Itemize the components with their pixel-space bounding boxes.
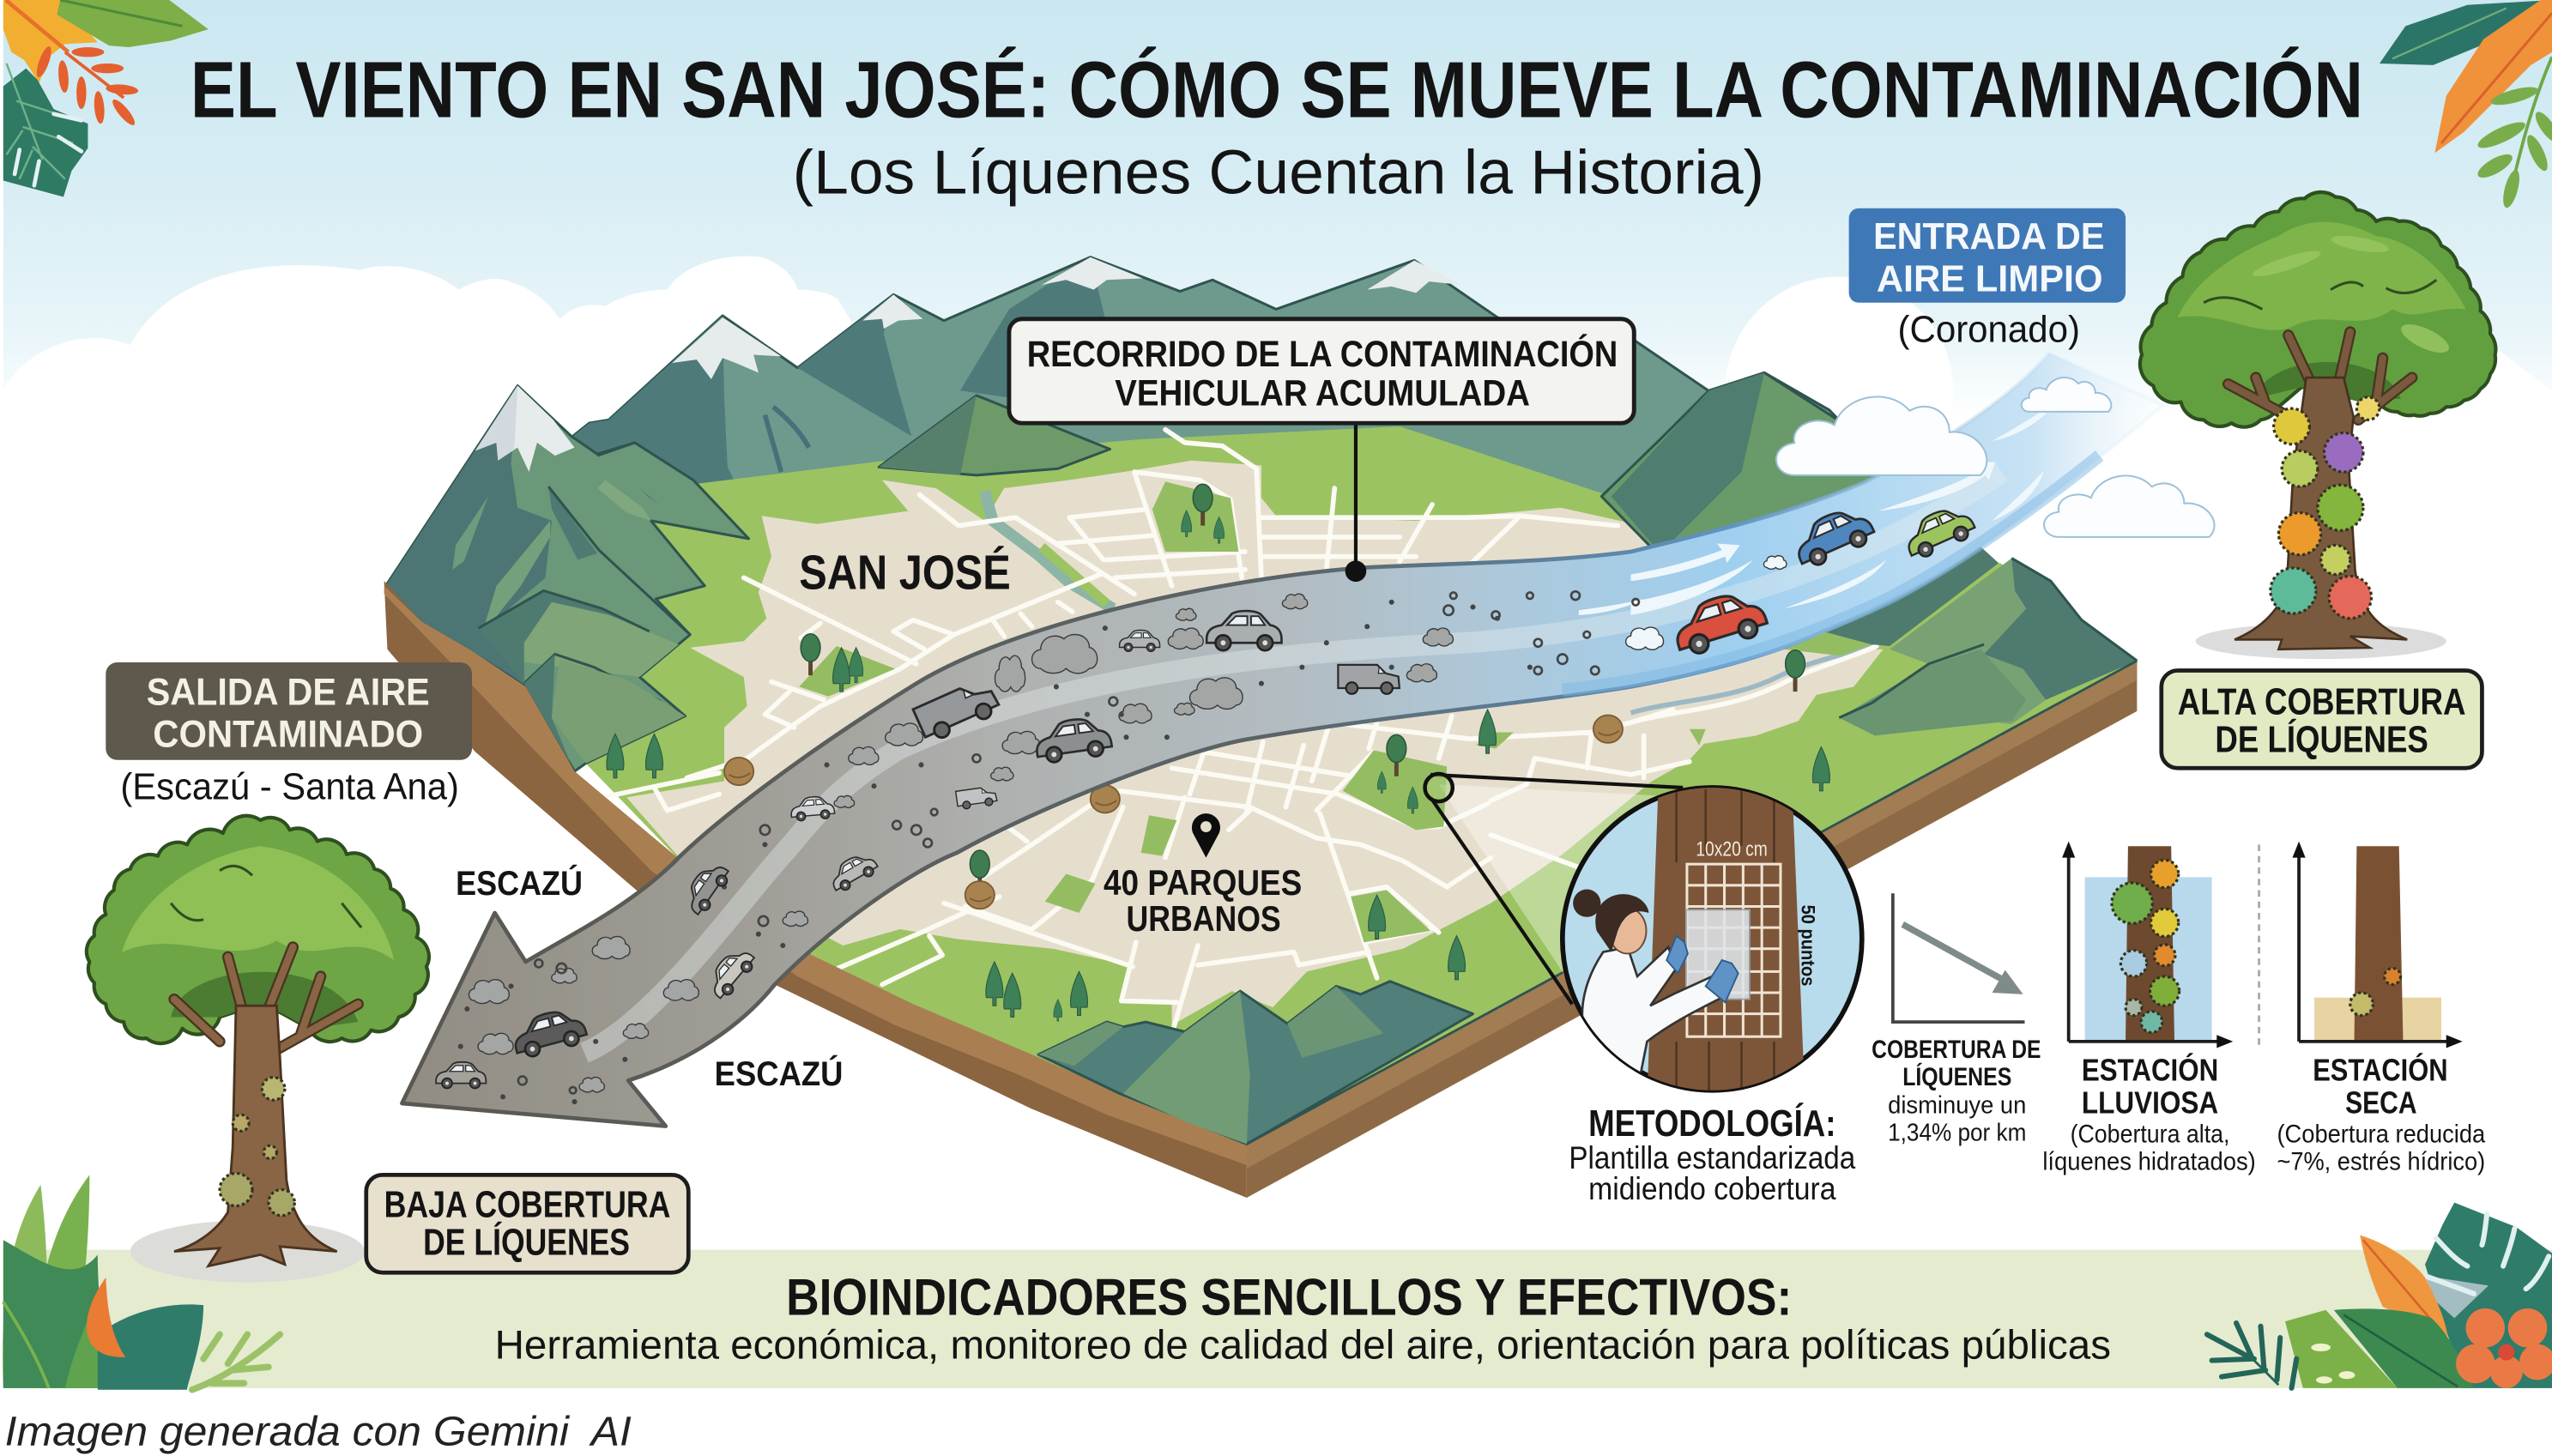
- terrain top surface: [386, 426, 2137, 1144]
- trunk and branches: [174, 947, 358, 1266]
- vehicles on the wind ribbon: [436, 500, 1978, 1089]
- chart: rainy season: líquenes hidratados): [2042, 1148, 2256, 1176]
- label: alta cobertura: [2162, 670, 2482, 768]
- urban area: [626, 461, 1883, 1025]
- label: 40 parques urbanos with pin: 40 PARQUES: [1104, 862, 1302, 903]
- car: red: [1668, 586, 1769, 659]
- callout: vehicle pollution route: [1009, 319, 1634, 582]
- corner mountain: [1839, 559, 2137, 735]
- chart: dry season: (Cobertura reducida: [2277, 1120, 2486, 1148]
- lower lobes: [512, 599, 679, 677]
- back mountain range: [573, 257, 1904, 537]
- background clouds: [3, 257, 2552, 813]
- polluted tree with low lichen cover: [87, 816, 429, 1283]
- chart: dry season: ESTACIÓN: [2313, 1051, 2448, 1087]
- label: alta cobertura: DE LÍQUENES: [2215, 717, 2428, 760]
- street network: [602, 430, 1877, 1029]
- label: 40 parques urbanos with pin: [1104, 813, 1302, 939]
- label: salida de aire contaminado: CONTAMINADO: [153, 714, 423, 756]
- label: entrada de aire limpio: [1849, 208, 2126, 350]
- callout: vehicle pollution route: RECORRIDO DE LA CONTAMINACIÓN: [1027, 333, 1618, 375]
- river: [984, 492, 1872, 713]
- shaded left face: [386, 386, 552, 684]
- label: salida de aire contaminado: (Escazú - Santa Ana): [120, 766, 459, 807]
- lichens on polluted trunk: [220, 1078, 294, 1216]
- hibiscus: [2456, 1308, 2552, 1388]
- chart: lichen cover decline with distance: LÍQUENES: [1902, 1062, 2011, 1091]
- methodology inset: [1425, 774, 1862, 1098]
- foliage: bottom left: [3, 1175, 280, 1390]
- right mountains: [1601, 372, 2137, 735]
- pollution puffs and particles: [461, 556, 1787, 1102]
- red fern: [33, 45, 139, 128]
- trunk and branches: [2228, 332, 2412, 649]
- healthy tree with high lichen cover: [2140, 192, 2495, 659]
- foliage: top left: [3, 0, 209, 197]
- scientist: [1573, 889, 1739, 1072]
- label: salida de aire contaminado: [106, 662, 472, 807]
- front mountain range: [1038, 982, 1473, 1144]
- zoom beam pale overlay: [1439, 784, 1693, 1009]
- soil sides of the terrain block: [384, 581, 2137, 1198]
- footer text: Herramienta económica, monitoreo de calidad del aire, orientación para políticas públicas: [495, 1323, 2111, 1368]
- label: entrada de aire limpio: (Coronado): [1898, 309, 2080, 350]
- car: green: [1900, 500, 1978, 562]
- dark fern: [2207, 1323, 2296, 1388]
- methodology caption: midiendo cobertura: [1588, 1171, 1836, 1206]
- chart: rainy season: (Cobertura alta,: [2071, 1120, 2229, 1148]
- wind ribbon arrow: [402, 353, 2163, 1127]
- label: entrada de aire limpio: ENTRADA DE: [1873, 216, 2104, 257]
- lichens on healthy trunk: [2271, 397, 2380, 619]
- survey grid: [1687, 864, 1781, 1036]
- chart: lichen cover decline with distance: [1872, 893, 2041, 1147]
- label: 40 parques urbanos with pin: URBANOS: [1127, 898, 1281, 939]
- chart: rainy season: ESTACIÓN: [2082, 1051, 2218, 1087]
- clouds over the clean air stream: [1776, 378, 2215, 537]
- foliage: bottom right: [2207, 1203, 2552, 1388]
- methodology inset: 50 puntos: [1798, 905, 1819, 986]
- chart: rainy season: LLUVIOSA: [2082, 1084, 2218, 1120]
- methodology inset: 10x20 cm: [1696, 839, 1768, 861]
- terrain trees and rocks: [607, 484, 1829, 1021]
- label: Escazú north: ESCAZÚ: [456, 863, 583, 903]
- footer heading: BIOINDICADORES SENCILLOS Y EFECTIVOS:: [786, 1268, 1792, 1326]
- white wind arrows: [1579, 401, 2057, 615]
- label: salida de aire contaminado: SALIDA DE AIRE: [147, 671, 430, 713]
- chart: dry season: ~7%, estrés hídrico): [2277, 1148, 2485, 1176]
- label: alta cobertura: ALTA COBERTURA: [2178, 682, 2465, 723]
- label: baja cobertura: BAJA COBERTURA: [384, 1185, 670, 1226]
- snow cap: [475, 386, 575, 472]
- foliage: top right: [2380, 0, 2552, 209]
- label: Escazú south: ESCAZÚ: [715, 1054, 843, 1093]
- subtitle: (Los Líquenes Cuentan la Historia): [793, 139, 1764, 208]
- methodology caption: [1569, 1102, 1856, 1206]
- label: entrada de aire limpio: AIRE LIMPIO: [1877, 259, 2103, 300]
- mountain snow caps: [672, 257, 1461, 379]
- caption: Imagen generada con Gemini AI: [5, 1408, 632, 1454]
- chart: lichen cover decline with distance: disminuye un: [1888, 1091, 2026, 1119]
- label: baja cobertura: DE LÍQUENES: [423, 1220, 630, 1263]
- methodology caption: Plantilla estandarizada: [1569, 1140, 1856, 1175]
- label: San José: SAN JOSÉ: [799, 546, 1011, 601]
- crown: [87, 816, 429, 1043]
- crown: [2140, 192, 2495, 427]
- car: blue: [1788, 501, 1878, 571]
- callout: vehicle pollution route: VEHICULAR ACUMULADA: [1115, 372, 1530, 414]
- methodology caption: METODOLOGÍA:: [1588, 1102, 1835, 1145]
- city parks: [799, 481, 1872, 942]
- left mountain massif: [386, 386, 1110, 771]
- chart: lichen cover decline with distance: 1,34% por km: [1888, 1120, 2026, 1147]
- footer band: [3, 1250, 2552, 1388]
- chart: lichen cover decline with distance: COBERTURA DE: [1872, 1036, 2041, 1064]
- chart: rainy season: [2042, 842, 2256, 1176]
- chart: dry season: SECA: [2345, 1084, 2417, 1120]
- chart: dry season: [2277, 842, 2486, 1176]
- label: baja cobertura: [366, 1175, 688, 1272]
